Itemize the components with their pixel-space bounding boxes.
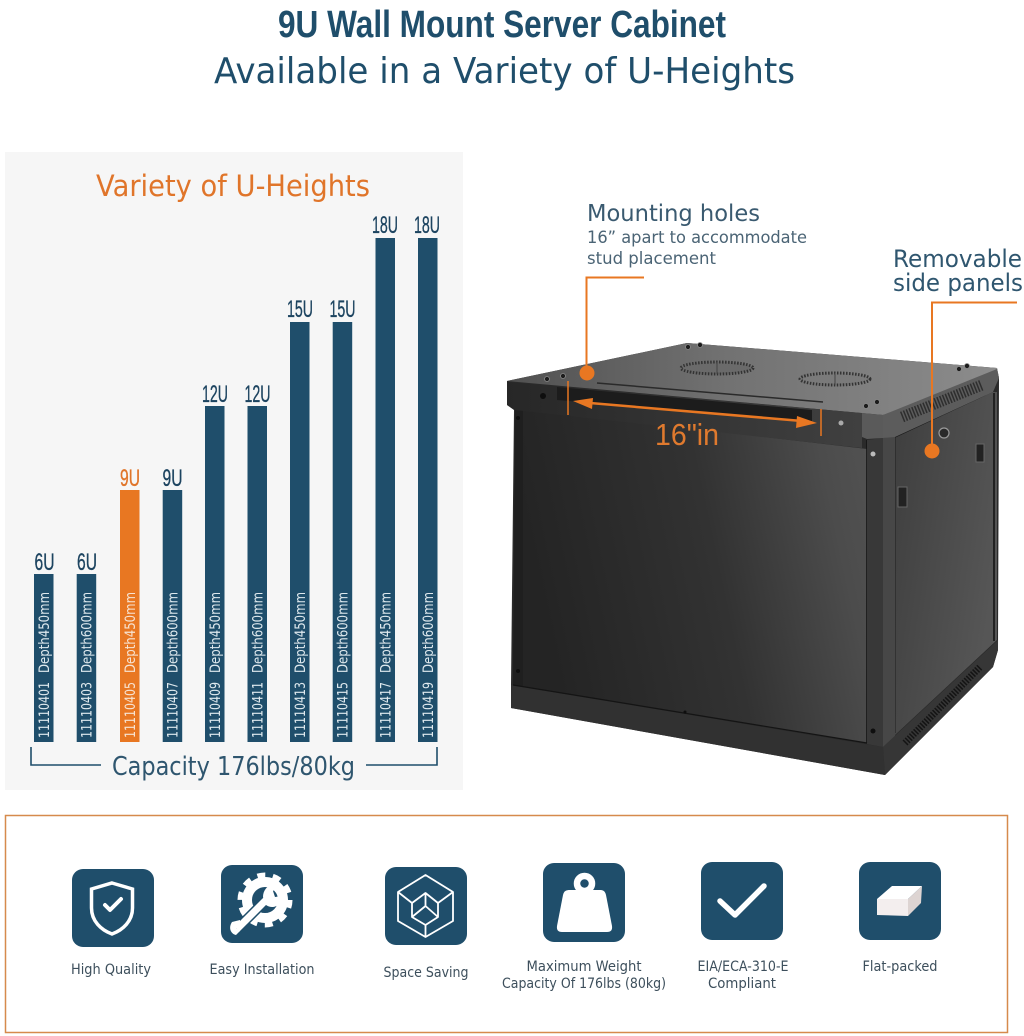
feature: space saving: Space Saving bbox=[384, 965, 468, 981]
bar chart: 6U bbox=[77, 549, 97, 576]
bar chart: 11110417 bbox=[378, 682, 394, 738]
feature: compliant: EIA/ECA-310-E bbox=[698, 959, 788, 975]
bar chart: Depth450mm bbox=[123, 592, 139, 673]
bar chart: Depth600mm bbox=[80, 592, 96, 673]
bar chart: 11110403 bbox=[80, 682, 96, 738]
bar chart: 11110413 bbox=[293, 682, 309, 738]
bar chart: 11110419 bbox=[421, 682, 437, 738]
feature: maximum weight: Capacity Of 176lbs (80kg) bbox=[502, 976, 666, 992]
bar chart: Depth450mm bbox=[293, 592, 309, 673]
feature: space saving bbox=[384, 867, 468, 981]
feature: flat-packed bbox=[859, 862, 941, 975]
capacity bracket: Capacity 176lbs/80kg bbox=[112, 752, 355, 782]
capacity bracket bbox=[31, 747, 437, 782]
feature: high quality bbox=[71, 869, 154, 978]
title: Available in a Variety of U-Heights bbox=[214, 51, 795, 92]
bar chart: Depth600mm bbox=[250, 592, 266, 673]
bar chart: 11110407 bbox=[166, 682, 182, 738]
bar chart: Depth600mm bbox=[166, 592, 182, 673]
bar chart: 11110409 bbox=[208, 682, 224, 738]
callout: mounting holes bbox=[580, 201, 807, 380]
arrow: 16 inch dimension: 16"in bbox=[655, 417, 719, 452]
feature: flat-packed: Flat-packed bbox=[862, 959, 938, 975]
callout: mounting holes: Mounting holes bbox=[587, 201, 760, 227]
panel: variety of U-heights bbox=[5, 152, 463, 790]
chart heading: Variety of U-Heights bbox=[96, 169, 370, 203]
feature: compliant: Compliant bbox=[708, 976, 776, 992]
bar chart bbox=[34, 212, 440, 742]
bar chart: 9U bbox=[162, 465, 182, 492]
bar chart: 11110411 bbox=[250, 682, 266, 738]
title bbox=[214, 4, 795, 92]
bar chart: 11110415 bbox=[336, 682, 352, 738]
bar chart: Depth450mm bbox=[378, 592, 394, 673]
cabinet illustration bbox=[507, 342, 999, 775]
callout: removable side panels: Removable bbox=[893, 245, 1022, 273]
bar chart: Depth450mm bbox=[37, 592, 53, 673]
feature: maximum weight: Maximum Weight bbox=[526, 959, 642, 975]
bar chart: Depth600mm bbox=[421, 592, 437, 673]
feature: high quality: High Quality bbox=[71, 962, 151, 978]
bar chart: 12U bbox=[244, 381, 270, 408]
bar chart: 11110405 bbox=[123, 682, 139, 738]
bar chart: 15U bbox=[287, 296, 313, 323]
bar chart: 6U bbox=[34, 549, 54, 576]
bar chart: Depth600mm bbox=[336, 592, 352, 673]
feature: easy installation: Easy Installation bbox=[210, 962, 314, 978]
arrow: 16 inch dimension bbox=[568, 381, 821, 452]
bar chart: Depth450mm bbox=[208, 592, 224, 673]
feature: compliant bbox=[698, 862, 788, 992]
callout: mounting holes: stud placement bbox=[587, 249, 716, 269]
bar chart: 12U bbox=[202, 381, 228, 408]
bar chart: 18U bbox=[414, 212, 440, 239]
bar chart: 9U bbox=[120, 465, 140, 492]
feature: easy installation bbox=[210, 865, 314, 978]
title: 9U Wall Mount Server Cabinet bbox=[278, 4, 726, 46]
feature: maximum weight bbox=[502, 863, 666, 992]
panel: features bbox=[6, 816, 1008, 1032]
callout: removable side panels bbox=[893, 245, 1023, 458]
bar chart: 11110401 bbox=[37, 682, 53, 738]
bar chart: 18U bbox=[372, 212, 398, 239]
callout: mounting holes: 16” apart to accommodate bbox=[587, 228, 807, 248]
bar chart: 15U bbox=[330, 296, 356, 323]
